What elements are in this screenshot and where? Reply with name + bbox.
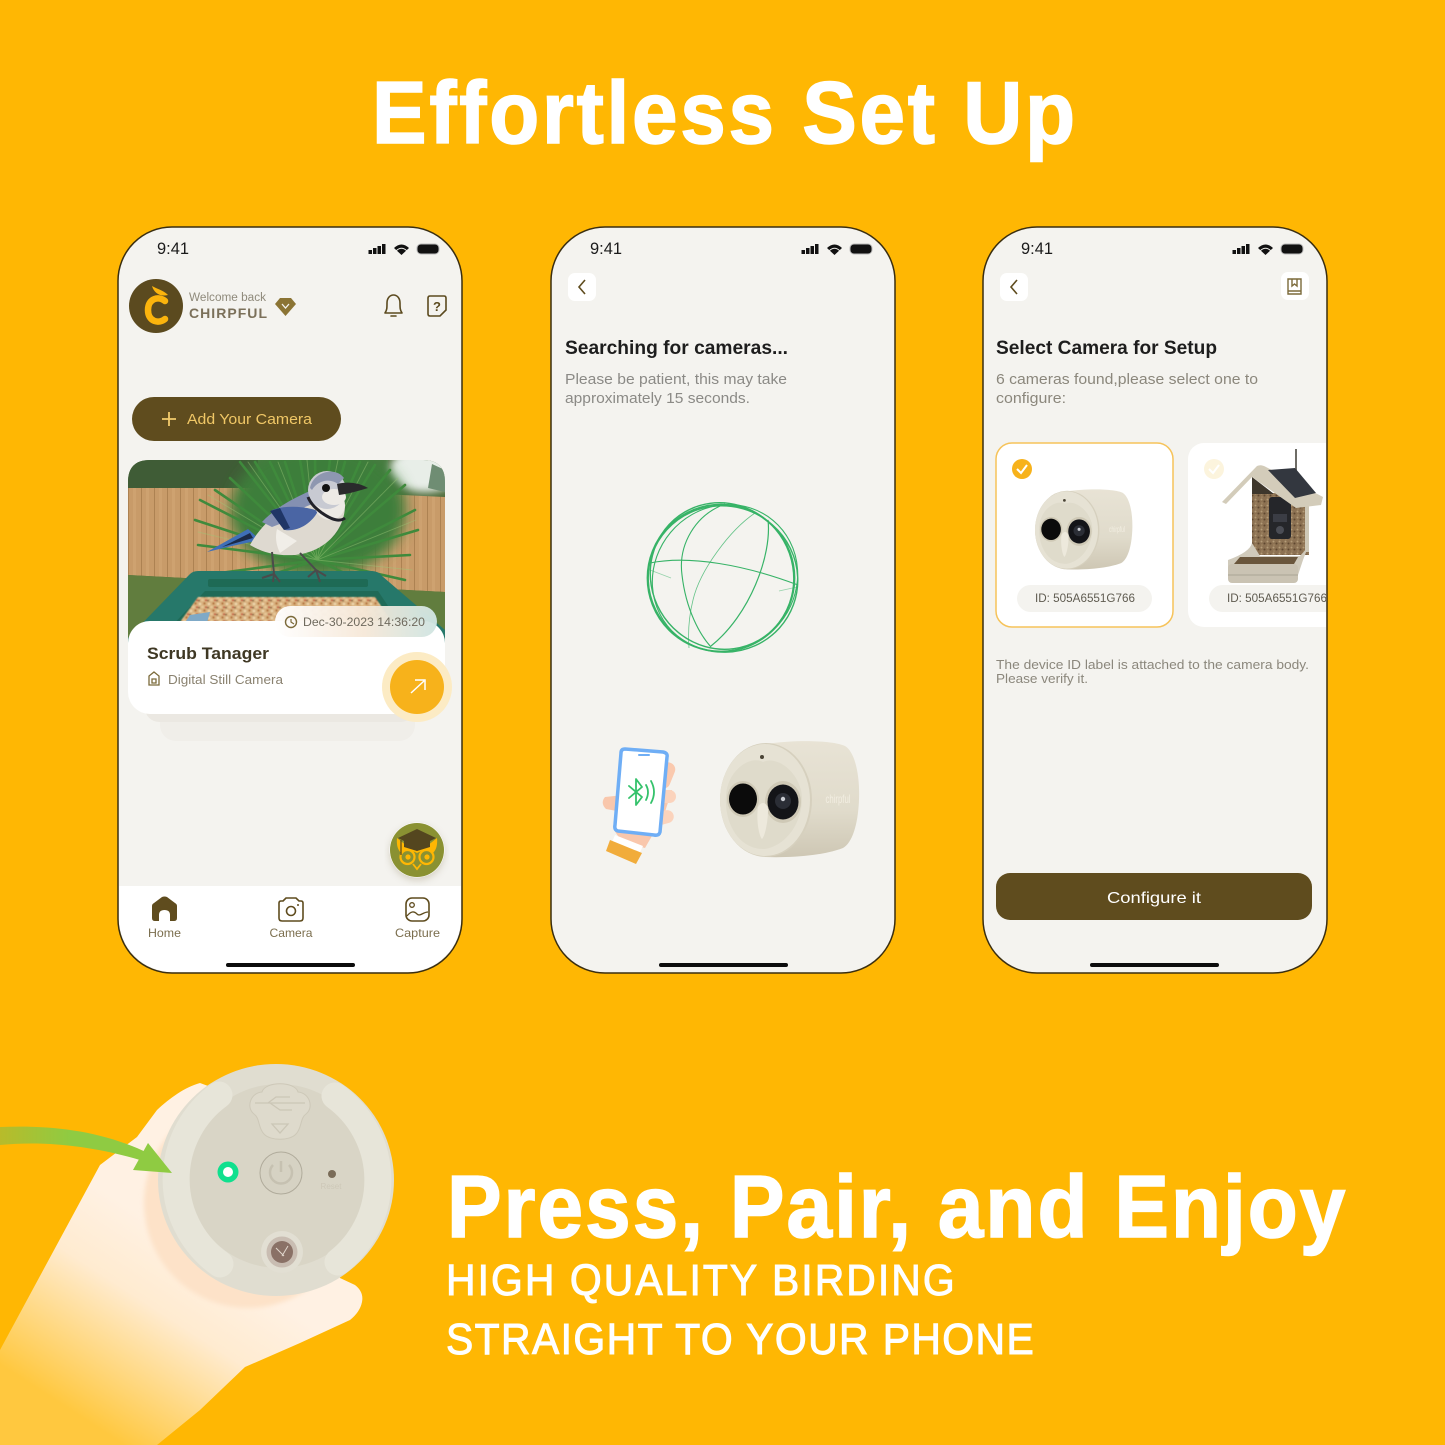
reset hole [321,1170,342,1191]
subheading: STRAIGHT TO YOUR PHONE [446,1316,1034,1364]
illustration: owl camera [720,741,859,857]
description [565,371,787,407]
status bar [590,240,872,258]
bird feeder camera card [1188,443,1326,627]
panel: phone 3 camera selection [983,227,1368,973]
hand holding device [0,1083,362,1445]
add camera button: Add Your Camera [187,411,313,428]
icon: help: ? [433,299,441,314]
description: 6 cameras found,please select one to [996,371,1258,388]
feeder [128,571,445,650]
nav: capture [395,898,440,940]
stacked card shadows [145,690,415,741]
id pill [1017,585,1152,612]
headline: press pair enjoy: Press, Pair, and Enjoy [447,1158,1345,1257]
fence [128,488,445,592]
arrow pointing to indicator [0,1127,172,1173]
bird card: Scrub Tanager [147,644,269,663]
nav: camera [270,898,313,940]
heading: Select Camera for Setup [996,338,1217,359]
back button [568,273,596,301]
grass [128,575,445,638]
configure button: Configure it [1107,890,1202,907]
status bar [1021,240,1303,258]
status bar: 9:41 [1021,240,1053,258]
reset hole: Reset [321,1182,342,1191]
device id note: The device ID label is attached to the camera body. [996,657,1309,672]
device: round base [158,1064,394,1296]
nav bar background [119,886,461,972]
panel: phone 1 home screen [118,227,462,973]
timestamp pill: Dec-30-2023 14:36:20 [303,615,425,629]
home indicator [659,963,788,967]
status bar: 9:41 [590,240,622,258]
timestamp pill [275,606,437,637]
bird card: Digital Still Camera [168,672,284,687]
add camera button [132,397,341,441]
welcome text [189,292,267,321]
subheading [446,1257,1034,1364]
icon: feeder [149,672,159,685]
nav: capture: Capture [395,926,440,940]
palm [194,460,420,582]
owl camera photo: chirpful [1109,525,1125,534]
bird [207,471,368,582]
home indicator [226,963,355,967]
panel: phone 2 searching screen [551,227,895,973]
icon: diamond badge [275,298,296,316]
status bar: 9:41 [157,240,189,258]
description: Please be patient, this may take [565,371,787,388]
rim bands [176,1095,378,1264]
bird photo [128,460,445,643]
icon: unchecked [1204,459,1224,479]
device id note: Please verify it. [996,671,1088,686]
usb cover [250,1084,310,1139]
guide book button [1281,272,1309,300]
configure button [996,873,1312,920]
back button [1000,273,1028,301]
illustration: hand holding phone with bluetooth [603,749,677,864]
heading: Searching for cameras... [565,338,788,359]
description: configure: [996,390,1066,407]
id pill [1209,585,1326,612]
status bar [157,240,439,258]
device id note [996,657,1309,686]
icon: help [428,296,446,316]
tripod screw [261,1231,303,1273]
bird card [128,606,452,722]
arrow button [382,652,452,722]
icon: checked [1012,459,1032,479]
power button [260,1152,302,1194]
green indicator light [218,1162,238,1182]
description: approximately 15 seconds. [565,390,750,407]
id pill: ID: 505A6551G766 [1035,593,1135,605]
subheading: HIGH QUALITY BIRDING [446,1257,955,1305]
owl mascot button [390,822,444,880]
title: Effortless Set Up [372,64,1075,163]
welcome text: CHIRPFUL [189,305,267,321]
welcome text: Welcome back [189,292,266,304]
profile avatar logo [129,279,183,333]
description [996,371,1258,407]
illustration: owl camera: chirpful [826,792,850,806]
home indicator [1090,963,1219,967]
nav: home [148,896,181,940]
icon: bell [385,295,402,316]
owl camera photo [1035,489,1132,569]
selected camera card [996,443,1173,627]
nav: camera: Camera [270,926,313,940]
bird feeder photo [1222,449,1323,583]
id pill: ID: 505A6551G766 [1227,593,1327,605]
searching globe [622,475,828,681]
nav: home: Home [148,926,181,940]
